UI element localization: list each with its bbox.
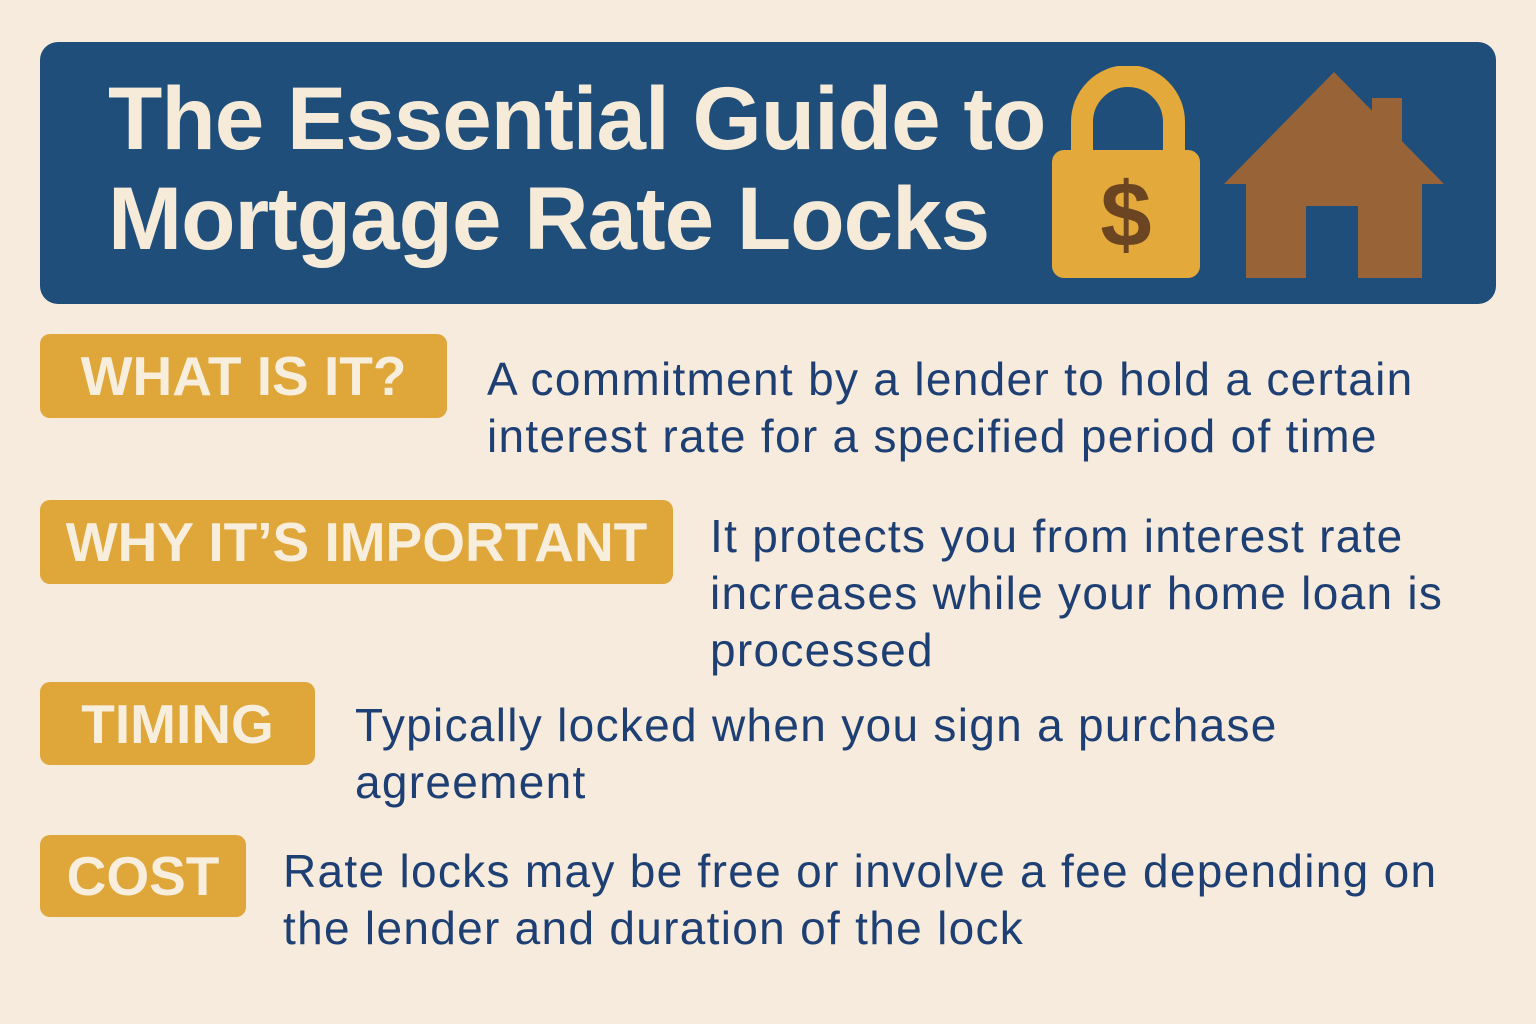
label: what is it: WHAT IS IT?: [81, 345, 406, 407]
label: timing: [40, 682, 315, 765]
text: cost description: the lender and duration of the lock: [283, 902, 1024, 954]
title: Mortgage Rate Locks: [108, 168, 989, 268]
text: cost description: [283, 845, 1437, 954]
icon: padlock with dollar sign: [1052, 66, 1200, 278]
text: why important description: [710, 510, 1443, 676]
text: why important description: processed: [710, 624, 934, 676]
label: why it's important: WHY IT’S IMPORTANT: [66, 511, 647, 573]
label: cost: COST: [67, 845, 219, 907]
label: timing: TIMING: [81, 692, 274, 754]
label: what is it: [40, 334, 447, 418]
text: timing description: Typically locked when you sign a purchase: [355, 699, 1278, 751]
title: [108, 68, 1045, 268]
text: what is it description: A commitment by a lender to hold a certain: [487, 353, 1414, 405]
title: The Essential Guide to: [108, 68, 1045, 168]
text: what is it description: interest rate for a specified period of time: [487, 410, 1378, 462]
header panel: [40, 42, 1496, 304]
label: why it's important: [40, 500, 673, 584]
icon: house: [1224, 72, 1444, 278]
text: timing description: [355, 699, 1278, 808]
icon: padlock with dollar sign: $: [1100, 164, 1152, 266]
text: cost description: Rate locks may be free or involve a fee depending on: [283, 845, 1437, 897]
text: what is it description: [487, 353, 1414, 462]
label: cost: [40, 835, 246, 917]
text: timing description: agreement: [355, 756, 587, 808]
text: why important description: increases while your home loan is: [710, 567, 1443, 619]
text: why important description: It protects you from interest rate: [710, 510, 1404, 562]
